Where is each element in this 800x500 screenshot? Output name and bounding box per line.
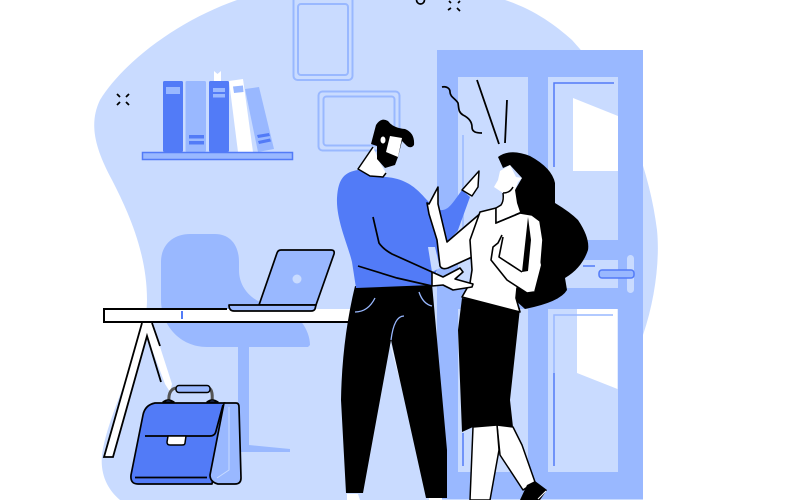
chair — [161, 234, 310, 452]
pale wedge by arm — [428, 247, 440, 272]
woman — [427, 152, 588, 500]
desk leg right — [389, 340, 416, 440]
chest arm — [491, 218, 541, 293]
face — [386, 136, 402, 157]
clasp — [167, 436, 186, 445]
flap line — [135, 405, 223, 478]
shoe — [520, 481, 547, 500]
sweater — [337, 170, 470, 288]
black wedge under arm — [522, 217, 531, 272]
briefcase side — [210, 403, 241, 484]
door handle — [599, 255, 634, 293]
sparkle left — [117, 94, 129, 105]
face and neck — [494, 165, 522, 222]
raised arm — [427, 187, 482, 269]
door panels — [458, 77, 618, 472]
bookmark — [214, 71, 221, 81]
hair — [498, 152, 588, 309]
bookshelf — [142, 71, 292, 160]
background blob — [94, 0, 658, 500]
window light top — [573, 98, 618, 171]
briefcase body — [131, 403, 225, 484]
sparkles top — [416, 0, 460, 11]
squiggle — [442, 87, 482, 133]
desk top — [104, 309, 364, 322]
door — [437, 50, 643, 499]
desk leg left — [104, 322, 172, 457]
ear — [380, 136, 386, 144]
exclamation lines — [477, 80, 507, 144]
wall frame top — [294, 0, 352, 80]
book 2 — [186, 81, 206, 152]
sweater creases — [358, 217, 432, 286]
shelf — [142, 152, 292, 160]
desk — [104, 309, 416, 457]
book 1 — [163, 81, 183, 152]
neck — [358, 147, 386, 177]
briefcase handle — [169, 386, 212, 402]
window light bottom — [577, 309, 618, 389]
man's hand on waist — [432, 268, 473, 290]
handle feet — [163, 400, 218, 402]
panel lines — [463, 83, 614, 466]
raised hand — [462, 171, 479, 196]
man — [337, 120, 479, 500]
briefcase — [131, 386, 241, 484]
torso — [462, 208, 543, 312]
skirt — [458, 298, 520, 432]
legs — [470, 425, 535, 500]
book 3 — [209, 81, 229, 152]
door frame — [437, 50, 643, 499]
book 4 — [229, 79, 253, 152]
book 5 — [245, 87, 274, 152]
wall frame lower — [318, 92, 400, 150]
side highlight — [217, 407, 229, 478]
hair and beard — [371, 120, 414, 168]
pants — [341, 284, 447, 500]
laptop — [229, 250, 334, 311]
